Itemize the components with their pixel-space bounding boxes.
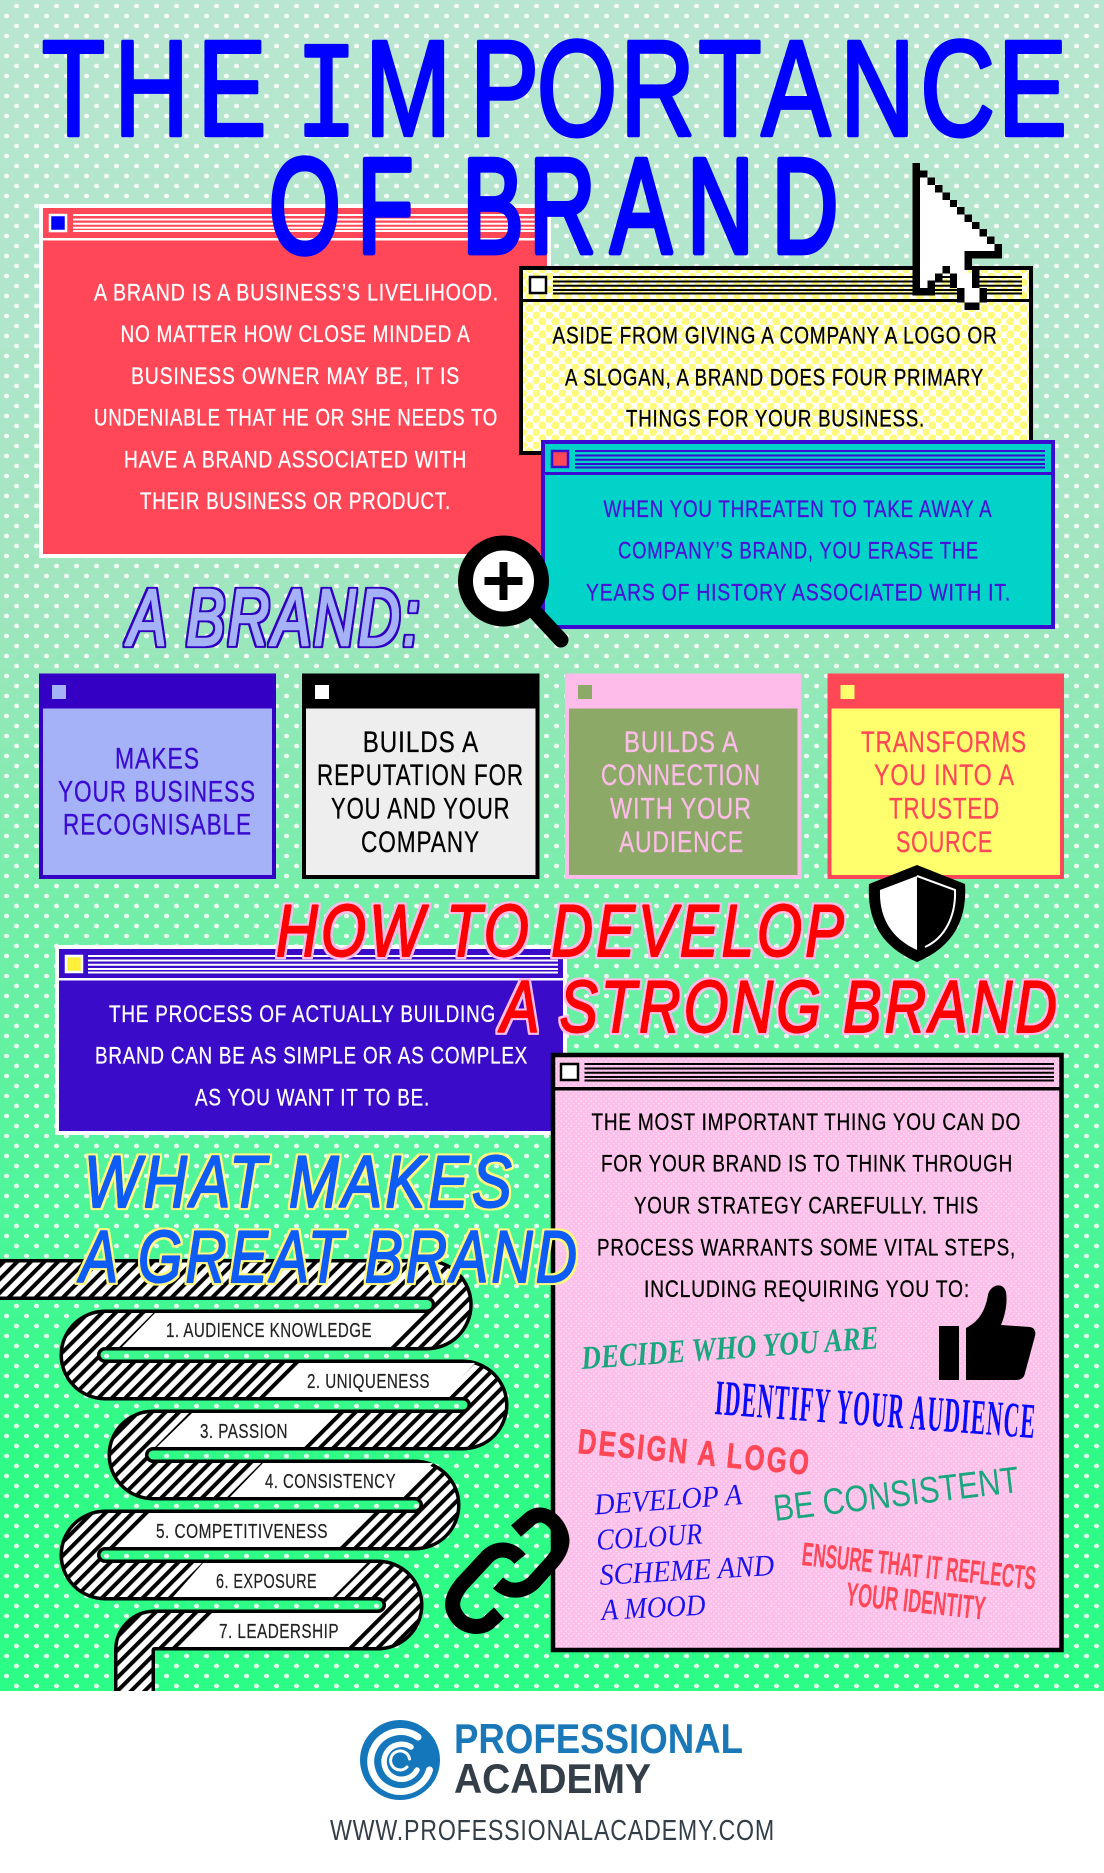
icon: magnifier: [466, 543, 561, 640]
panel: card transforms: [828, 674, 1064, 879]
card text: [317, 726, 524, 859]
card text: YOU AND YOUR: [331, 792, 510, 826]
label: leadership: 7. LEADERSHIP: [219, 1621, 339, 1643]
footer: [0, 1691, 1104, 1873]
card text: BUILDS A: [363, 726, 479, 759]
label: leadership: [183, 1613, 377, 1647]
label: competitiveness: [117, 1513, 372, 1547]
label: exposure: 6. EXPOSURE: [216, 1571, 317, 1593]
panel: red window: [41, 206, 549, 556]
title: [42, 13, 1067, 282]
purple window text: [95, 1001, 528, 1112]
card text: [601, 726, 761, 859]
red window text: UNDENIABLE THAT HE OR SHE NEEDS TO: [94, 404, 498, 432]
label: exposure: [173, 1563, 367, 1597]
step: develop a colour scheme and a mood: A MOOD: [599, 1589, 707, 1627]
heading: a brand: A BRAND:: [125, 573, 422, 662]
panel: card builds connection: [565, 674, 802, 879]
pink window text: INCLUDING REQUIRING YOU TO:: [644, 1276, 970, 1303]
card text: WITH YOUR: [610, 792, 752, 826]
teal window text: COMPANY’S BRAND, YOU ERASE THE: [618, 538, 979, 564]
teal window text: WHEN YOU THREATEN TO TAKE AWAY A: [604, 496, 992, 523]
label: audience knowledge: 1. AUDIENCE KNOWLEDGE: [166, 1320, 372, 1342]
red window text: A BRAND IS A BUSINESS’S LIVELIHOOD.: [94, 280, 499, 306]
panel: card builds reputation: [302, 674, 540, 879]
card text: [861, 726, 1027, 859]
panel: pink window: [553, 1055, 1062, 1650]
card text: TRUSTED: [889, 792, 1000, 826]
brand name: [454, 1715, 743, 1802]
title: OF BRAND: [269, 131, 838, 282]
step: develop a colour scheme and a mood: SCHEME AND: [599, 1549, 775, 1592]
panel: teal window: [543, 442, 1053, 627]
teal window text: [586, 496, 1011, 606]
card text: SOURCE: [896, 826, 993, 859]
card text: MAKES: [115, 742, 200, 776]
yellow window text: A SLOGAN, A BRAND DOES FOUR PRIMARY: [565, 364, 984, 392]
card text: REPUTATION FOR: [317, 759, 524, 792]
label: passion: 3. PASSION: [200, 1421, 288, 1443]
step: develop a colour scheme and a mood: COLOUR: [595, 1518, 703, 1557]
heading: what makes a great brand: [77, 1142, 580, 1298]
brand name: PROFESSIONAL: [454, 1715, 743, 1762]
step: ensure that it reflects your identity: YOUR IDENTITY: [844, 1575, 987, 1627]
card text: [58, 742, 256, 842]
card text: RECOGNISABLE: [63, 808, 252, 842]
yellow window text: THINGS FOR YOUR BUSINESS.: [626, 406, 925, 432]
purple window text: THE PROCESS OF ACTUALLY BUILDING: [109, 1001, 496, 1028]
label: passion: [157, 1413, 337, 1447]
heading: what makes a great brand: WHAT MAKES: [84, 1142, 515, 1223]
card text: BUILDS A: [624, 726, 739, 759]
purple window text: BRAND CAN BE AS SIMPLE OR AS COMPLEX: [95, 1042, 528, 1070]
purple window text: AS YOU WANT IT TO BE.: [195, 1084, 430, 1112]
label: competitiveness: 5. COMPETITIVENESS: [156, 1521, 328, 1543]
red window text: BUSINESS OWNER MAY BE, IT IS: [131, 363, 460, 390]
yellow window text: [552, 322, 998, 432]
red window text: THEIR BUSINESS OR PRODUCT.: [140, 488, 451, 515]
card text: YOU INTO A: [874, 759, 1015, 792]
pink window text: YOUR STRATEGY CAREFULLY. THIS: [634, 1192, 979, 1220]
step: design a logo: DESIGN A LOGO: [576, 1422, 813, 1483]
card text: TRANSFORMS: [861, 726, 1027, 759]
title: THE IMPORTANCE: [42, 13, 1067, 177]
card text: YOUR BUSINESS: [58, 776, 256, 808]
step: develop a colour scheme and a mood: [592, 1478, 775, 1627]
heading: how to develop a strong brand: HOW TO DEVELOP: [276, 891, 847, 972]
step: be consistent: BE CONSISTENT: [771, 1459, 1021, 1529]
label: audience knowledge: [122, 1313, 422, 1347]
label: consistency: [230, 1463, 433, 1497]
panel: purple window: [57, 947, 565, 1133]
red window text: [94, 280, 499, 515]
brand name: ACADEMY: [454, 1755, 651, 1802]
heading: what makes a great brand: A GREAT BRAND: [77, 1217, 580, 1298]
heading: how to develop a strong brand: [276, 891, 1060, 1048]
panel: yellow window: [521, 268, 1031, 453]
step: develop a colour scheme and a mood: DEVELOP A: [592, 1478, 744, 1522]
icon: chain link: [453, 1515, 562, 1626]
card text: CONNECTION: [601, 759, 761, 792]
chart: striped road of brand qualities: [0, 1280, 488, 1700]
icon: logo swirl: [360, 1720, 440, 1800]
panel: card makes recognisable: [39, 674, 276, 879]
icon: thumbs up: [939, 1285, 1035, 1380]
label: uniqueness: [268, 1363, 475, 1397]
icon: shield: [869, 865, 965, 962]
label: consistency: 4. CONSISTENCY: [265, 1471, 396, 1493]
icon: cursor: [912, 163, 1002, 310]
card text: COMPANY: [361, 826, 480, 859]
pink window text: [592, 1109, 1021, 1303]
website url: WWW.PROFESSIONALACADEMY.COM: [330, 1815, 775, 1847]
step: decide who you are: DECIDE WHO YOU ARE: [579, 1320, 880, 1377]
red window text: NO MATTER HOW CLOSE MINDED A: [120, 321, 470, 348]
label: uniqueness: 2. UNIQUENESS: [307, 1371, 430, 1393]
red window text: HAVE A BRAND ASSOCIATED WITH: [124, 446, 467, 474]
card text: AUDIENCE: [619, 826, 744, 859]
